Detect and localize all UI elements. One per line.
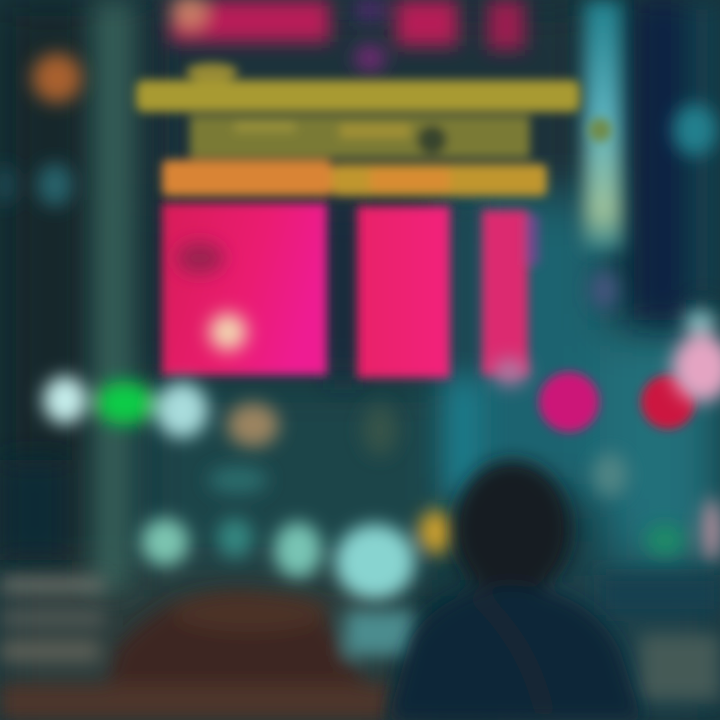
lights: right pink and red discs xyxy=(539,372,695,432)
lights: street row of white and green xyxy=(43,376,398,456)
sign: panel details xyxy=(176,242,528,386)
lights: left orange and teal glows xyxy=(0,53,82,207)
sign: light cyan vertical sign xyxy=(584,0,622,250)
sign: large pink panels xyxy=(162,203,539,378)
sign: yellow and orange title bands xyxy=(136,63,612,196)
lights: far-right glows xyxy=(590,104,720,402)
figure: silhouetted person xyxy=(388,460,642,720)
foreground: street and car tones xyxy=(0,575,720,720)
sign: top pink panels xyxy=(170,0,525,72)
lights: lower street glows xyxy=(141,453,720,600)
